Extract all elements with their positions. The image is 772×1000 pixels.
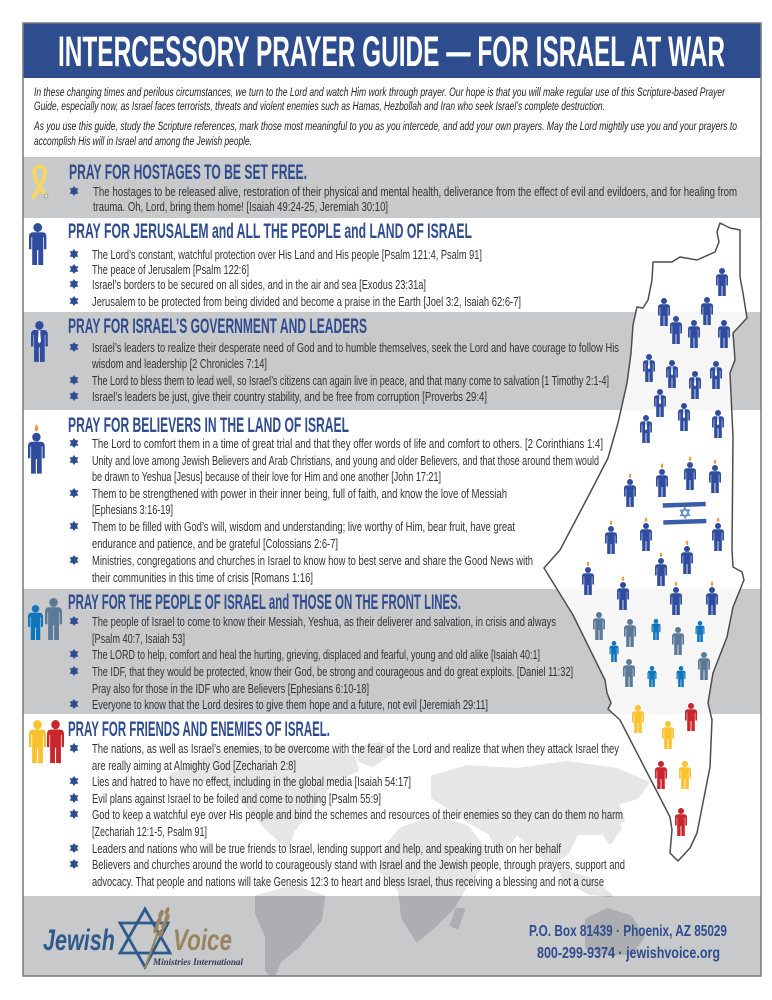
- map of Israel with people: [543, 222, 748, 862]
- bullet list: Pray also for those in the IDF who are Believers [Ephesians 6:10-18]: [92, 681, 369, 696]
- bullet list: [70, 614, 573, 712]
- bullet list: are really aiming at Almighty God [Zechariah 2:8]: [92, 758, 296, 773]
- panel: government and leaders: [23, 312, 761, 410]
- icon: person with tie: [31, 321, 48, 362]
- bullet list: trauma. Oh, Lord, bring them home! [Isaiah 49:24-25, Jeremiah 30:10]: [93, 199, 388, 214]
- logo: [43, 907, 243, 968]
- intro text: accomplish His will in Israel and among the Jewish people.: [34, 136, 252, 148]
- bullet list: their communities in this time of crisis [Romans 1:16]: [92, 570, 313, 585]
- contact details: 800-299-9374 · jewishvoice.org: [537, 945, 720, 962]
- logo: Ministries International: [152, 958, 243, 968]
- bullet list: The peace of Jerusalem [Psalm 122:6]: [92, 262, 249, 277]
- bullet list: endurance and patience, and be grateful [Colossians 2:6-7]: [92, 536, 338, 551]
- contact details: [529, 923, 727, 962]
- bullet list: [70, 436, 603, 585]
- people: friends: [632, 705, 691, 789]
- bullet list: The people of Israel to come to know their Messiah, Yeshua, as their deliverer and salvation, in crisis and always: [92, 614, 556, 629]
- world map: [170, 744, 647, 976]
- icon: yellow ribbon: [33, 166, 48, 199]
- bullet list: Them to be strengthened with power in their inner being, full of faith, and know the love of Messiah: [92, 486, 507, 501]
- bullet list: The Lord to comfort them in a time of great trial and that they offer words of life and comfort to others. [2 Corinthians 1:4]: [92, 436, 603, 451]
- heading: PRAY FOR HOSTAGES TO BE SET FREE.: [69, 161, 307, 184]
- icon: two people: [28, 598, 62, 640]
- bullet list: The Lord’s constant, watchful protection over His Land and His people [Psalm 121:4, Psalm 91]: [92, 247, 482, 262]
- logo: Jewish: [43, 924, 115, 957]
- bullet list: [70, 741, 625, 889]
- panel: people and front lines: [23, 589, 761, 714]
- icon: two people: [29, 720, 64, 763]
- bullet list: The IDF, that they would be protected, know their God, be strong and courageous and do great exploits. [Daniel 11:32]: [92, 664, 573, 679]
- bullet list: be drawn to Yeshua [Jesus] because of their love for Him and one another [John 17:21]: [92, 469, 441, 484]
- panel: believers: [28, 414, 603, 585]
- heading: PRAY FOR FRIENDS AND ENEMIES OF ISRAEL.: [68, 718, 330, 741]
- bullet list: [70, 340, 619, 404]
- intro text: [33, 87, 737, 148]
- heading: PRAY FOR BELIEVERS IN THE LAND OF ISRAEL: [68, 414, 349, 437]
- icon: person with flame: [28, 424, 45, 474]
- bullet list: Israel’s borders to be secured on all sides, and in the air and sea [Exodus 23:31a]: [92, 277, 426, 292]
- icon: person: [29, 223, 46, 265]
- bullet list: Them to be filled with God’s will, wisdom and understanding; live worthy of Him, bear fruit, have great: [92, 519, 515, 534]
- people: enemies: [655, 703, 697, 836]
- bullet list: [70, 184, 737, 214]
- people: front lines: [593, 612, 710, 687]
- logo: Voice: [173, 924, 232, 957]
- panel: friends and enemies: [29, 718, 625, 889]
- heading: PRAY FOR ISRAEL’S GOVERNMENT AND LEADERS: [68, 315, 367, 338]
- bullet list: Evil plans against Israel to be foiled and come to nothing [Psalm 55:9]: [92, 791, 381, 806]
- bullet list: Jerusalem to be protected from being divided and become a praise in the Earth [Joel 3:2, Isaiah 62:6-7]: [92, 294, 521, 309]
- bullet list: [Psalm 40:7, Isaiah 53]: [92, 631, 185, 646]
- heading: PRAY FOR JERUSALEM and ALL THE PEOPLE and LAND OF ISRAEL: [68, 220, 472, 243]
- bullet list: [Zechariah 12:1-5, Psalm 91]: [92, 824, 207, 839]
- bullet list: The LORD to help, comfort and heal the hurting, grieving, displaced and fearful, young and old alike [Isaiah 40:1]: [92, 647, 540, 662]
- people: residents: [658, 268, 730, 348]
- people: citizens: [610, 619, 704, 687]
- people: believers: [582, 456, 724, 615]
- heading: PRAY FOR THE PEOPLE OF ISRAEL and THOSE ON THE FRONT LINES.: [68, 591, 461, 614]
- bullet list: wisdom and leadership [2 Chronicles 7:14]: [91, 356, 267, 371]
- bullet list: Lies and hatred to have no effect, including in the global media [Isaiah 54:17]: [92, 774, 411, 789]
- map outline: [543, 222, 748, 862]
- panel: Jerusalem and the land: [29, 220, 521, 309]
- bullet list: Ministries, congregations and churches in Israel to know how to best serve and share the Good News with: [92, 553, 533, 568]
- bullet list: Israel’s leaders be just, give their country stability, and be free from corruption [Proverbs 29:4]: [92, 389, 487, 404]
- icon: Israeli flag: [663, 499, 706, 528]
- bullet list: Leaders and nations who will be true friends to Israel, lending support and help, and speaking truth on her behalf: [92, 841, 561, 856]
- bullet list: Everyone to know that the Lord desires to give them hope and a future, not evil [Jeremiah 29:11]: [92, 697, 488, 712]
- panel: hostages: [23, 157, 761, 218]
- bullet list: [70, 247, 521, 309]
- bullet list: [Ephesians 3:16-19]: [92, 502, 173, 517]
- footer panel background: [23, 896, 761, 976]
- people: leaders: [640, 354, 724, 443]
